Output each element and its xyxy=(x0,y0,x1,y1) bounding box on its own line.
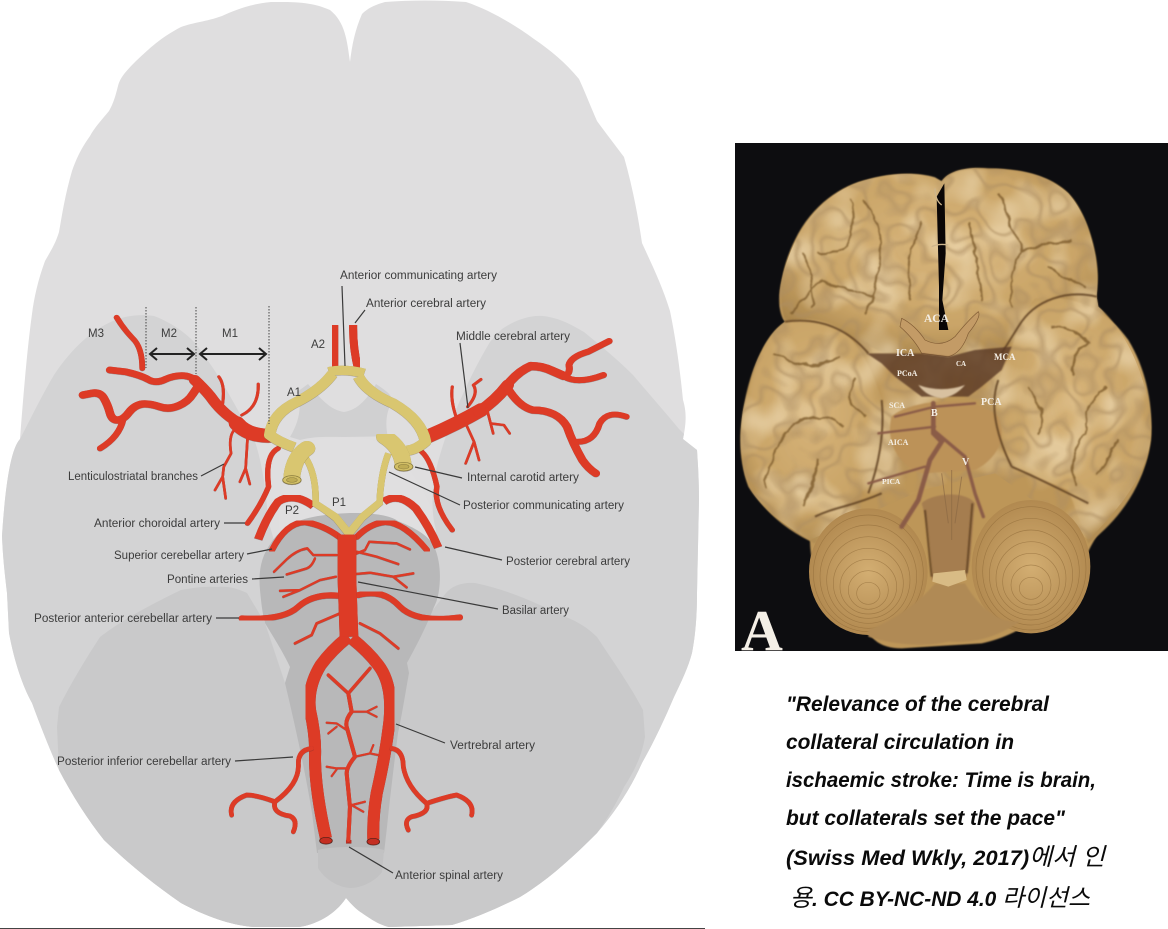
cerebellum left xyxy=(809,508,928,635)
vessels xyxy=(868,403,983,527)
interhemispheric fissure xyxy=(937,183,948,330)
anterior spinal artery xyxy=(327,668,378,840)
diagram labels: Middle cerebral artery xyxy=(456,331,570,343)
posterior inferior cerebellar arteries xyxy=(231,748,472,832)
basilar, vertebral and cerebellar arteries xyxy=(231,522,472,845)
sulci xyxy=(765,193,1118,507)
photo annotation labels: MCA xyxy=(994,352,1016,362)
temporal lobes xyxy=(2,315,699,833)
photo annotation labels xyxy=(741,313,1016,663)
M segment dividers and arrows xyxy=(146,306,269,424)
diagram labels: Posterior communicating artery xyxy=(463,500,624,512)
panel: arterial diagram xyxy=(0,0,705,929)
citation caption: "Relevance of the cerebral xyxy=(786,693,1050,716)
diagram labels: Internal carotid artery xyxy=(467,472,579,484)
yellow circle of Willis xyxy=(270,370,425,535)
arrow: M2 span xyxy=(150,348,194,360)
frontal lobes xyxy=(781,169,1098,353)
citation caption: but collaterals set the pace" xyxy=(786,807,1066,830)
sulcal contour texture xyxy=(740,168,1151,540)
diagram labels: Anterior choroidal artery xyxy=(94,518,220,530)
diagram labels: Pontine arteries xyxy=(167,574,248,586)
pontine arteries xyxy=(274,542,413,648)
right temporal lobe xyxy=(992,297,1151,543)
posterior cerebral arteries P2 xyxy=(258,498,438,547)
vertebral and basilar trunk xyxy=(310,535,390,839)
diagram labels: A2 xyxy=(311,339,325,351)
photo annotation labels: AICA xyxy=(888,438,909,447)
brain silhouette base xyxy=(740,168,1151,648)
spotted tracts xyxy=(942,470,962,540)
diagram labels: Anterior cerebral artery xyxy=(366,298,486,310)
photo annotation labels: V xyxy=(962,457,970,468)
superior cerebellar arteries xyxy=(272,522,427,550)
brain outline: cerebrum xyxy=(2,0,699,927)
citation caption xyxy=(786,693,1107,912)
spinal cord end xyxy=(318,847,384,888)
diagram labels: Posterior cerebral artery xyxy=(506,556,630,568)
brain specimen xyxy=(740,168,1151,648)
diagram labels: Lenticulostriatal branches xyxy=(68,471,198,483)
diagram labels: Anterior spinal artery xyxy=(395,870,503,882)
brainstem and medulla xyxy=(922,495,975,580)
ventral star region xyxy=(290,384,392,440)
diagram labels: M1 xyxy=(222,328,238,340)
panel: brain specimen photo xyxy=(735,143,1168,663)
vascular center dark xyxy=(867,347,1012,397)
diagram labels: Basilar artery xyxy=(502,605,569,617)
lobe boundary shadows xyxy=(785,294,1097,577)
cerebellum right xyxy=(972,500,1090,633)
anterior choroidal arteries xyxy=(248,448,452,530)
diagram labels: Vertrebral artery xyxy=(450,740,535,752)
diagram labels: M3 xyxy=(88,328,104,340)
photo annotation labels: SCA xyxy=(889,401,905,410)
left middle cerebral artery xyxy=(83,317,269,498)
diagram labels: A1 xyxy=(287,387,301,399)
right middle cerebral artery xyxy=(427,341,626,473)
brainstem and pons xyxy=(259,513,440,853)
diagram labels: Superior cerebellar artery xyxy=(114,550,244,562)
central light area xyxy=(278,438,432,540)
diagram labels: P2 xyxy=(285,505,299,517)
photo annotation labels: PICA xyxy=(882,477,901,486)
diagram labels: Posterior anterior cerebellar artery xyxy=(34,613,212,625)
diagram labels xyxy=(34,270,630,882)
citation caption: 용. CC BY-NC-ND 4.0 라이선스 xyxy=(790,885,1091,912)
photo annotation labels: B xyxy=(931,408,938,419)
diagram labels: M2 xyxy=(161,328,177,340)
citation caption: collateral circulation in xyxy=(786,731,1014,754)
diagram labels: P1 xyxy=(332,497,346,509)
photo annotation labels: A xyxy=(741,598,783,663)
photo background xyxy=(735,143,1168,651)
pons xyxy=(890,402,1002,473)
diagram labels: Anterior communicating artery xyxy=(340,270,497,282)
left temporal lobe xyxy=(742,319,883,543)
photo annotation labels: CA xyxy=(956,360,966,368)
arrow: M1 span xyxy=(200,348,266,360)
circle of Willis and cerebral arteries xyxy=(83,317,626,547)
vertebral stump ends xyxy=(320,837,380,845)
citation caption: ischaemic stroke: Time is brain, xyxy=(786,769,1096,792)
mottled gyri highlights xyxy=(740,168,1151,540)
anterior inferior cerebellar arteries xyxy=(242,593,460,619)
leader lines xyxy=(201,286,502,873)
citation caption: (Swiss Med Wkly, 2017) 에서 인 xyxy=(786,844,1107,871)
bottom rule xyxy=(0,928,705,929)
photo annotation labels: PCA xyxy=(981,397,1002,408)
photo annotation labels: ICA xyxy=(896,348,915,359)
internal carotid arteries xyxy=(283,437,413,484)
photo annotation labels: PCoA xyxy=(897,369,918,378)
photo annotation labels: ACA xyxy=(924,313,950,325)
cerebellum xyxy=(57,583,645,927)
cerebellar folia xyxy=(813,507,1086,632)
midline lower lobe xyxy=(868,583,1022,645)
diagram labels: Posterior inferior cerebellar artery xyxy=(57,756,231,768)
anterior cerebral arteries A2 xyxy=(334,325,359,371)
optic chiasm xyxy=(900,312,979,357)
